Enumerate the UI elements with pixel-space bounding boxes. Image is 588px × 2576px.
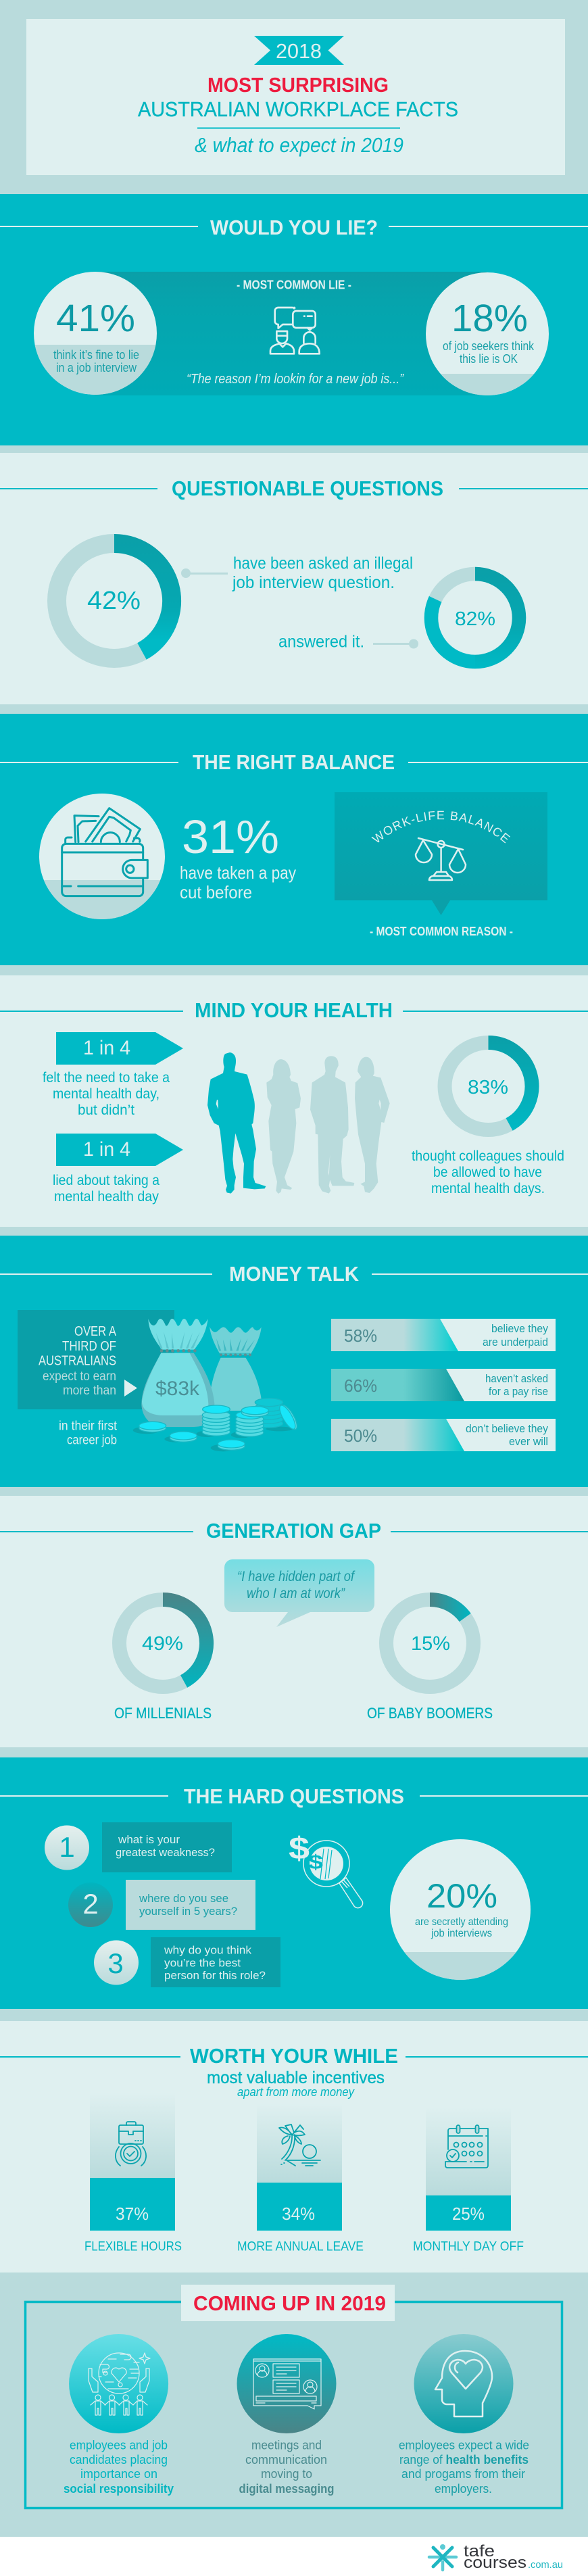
callout: work-life balance: WORK-LIFE BALANCE: [372, 811, 510, 844]
donut chart: 49% of millenials: [114, 1599, 212, 1722]
panel: mind your health: [0, 975, 588, 1227]
bar: monthly day off: 25%: [452, 2204, 485, 2224]
donut chart: 15% of baby boomers: 15%: [411, 1633, 450, 1655]
item: health benefits: range of health benefits: [399, 2453, 529, 2466]
speech bubble: [224, 1559, 374, 1627]
stat circle: 18%: this lie is OK: [460, 352, 518, 366]
bar: 50%: 50%: [344, 1426, 377, 1446]
panel: generation gap: [0, 1496, 588, 1747]
text: thought colleagues: [412, 1148, 564, 1196]
bar: 58%: believe they: [491, 1322, 548, 1335]
bar: 66%: 66%: [344, 1376, 377, 1396]
stat circle: 41%: in a job interview: [56, 361, 137, 374]
heading: money talk: MONEY TALK: [229, 1262, 360, 1286]
bar: 66%: for a pay rise: [489, 1385, 548, 1398]
bar: 58%: [331, 1319, 556, 1351]
donut chart: 42%: [57, 543, 172, 658]
callout: over a third: THIRD OF: [62, 1339, 116, 1354]
panel: coming up in 2019: [26, 2285, 562, 2508]
arrow stat: lied: 1 in 4: [83, 1138, 130, 1161]
stat circle: 20%: job interviews: [431, 1928, 492, 1939]
text: in their first career job: in their first: [59, 1419, 118, 1433]
donut chart: 49% of millenials: 49%: [142, 1633, 183, 1655]
heading: the right balance: THE RIGHT BALANCE: [193, 750, 395, 774]
panel: questionable questions: [0, 453, 588, 704]
arrow stat: felt the need: [43, 1032, 183, 1118]
icon: palm tree and sun: [279, 2124, 320, 2166]
bar: flexible hours: 37%: [116, 2204, 149, 2224]
back stack: [139, 1399, 300, 1450]
bar: flexible hours: FLEXIBLE HOURS: [84, 2240, 182, 2254]
bar: 58%: are underpaid: [483, 1336, 548, 1348]
title text: & what to expect in 2019: [195, 133, 403, 157]
item: social responsibility: [64, 2334, 174, 2496]
arrow stat: felt the need: mental health day,: [53, 1086, 160, 1102]
callout: over a third: OVER A: [74, 1324, 117, 1339]
arrow stat: felt the need: but didn’t: [78, 1102, 134, 1118]
icon: briefcase and clock: [116, 2122, 146, 2166]
bar: more annual leave: 34%: [282, 2204, 315, 2224]
bar: 50%: [331, 1419, 556, 1451]
callout: over a third: more than: [63, 1384, 116, 1398]
bar: monthly day off: [413, 2107, 524, 2254]
question 1: [45, 1822, 232, 1872]
stat circle: 18%: of job seekers think: [443, 339, 535, 353]
item: health benefits: and progams from their: [401, 2467, 525, 2481]
callout: illegal question: have been asked an illegal: [233, 554, 413, 573]
logo: tafe courses: tafe: [464, 2542, 495, 2560]
text: thought colleagues: be allowed to have: [433, 1165, 542, 1180]
donut chart: 82%: 82%: [455, 608, 495, 630]
subheading: apart from more money: [237, 2085, 355, 2099]
callout: over a third: AUSTRALIANS: [39, 1353, 116, 1368]
icon: magnifier over dollar: [289, 1830, 363, 1908]
bar: more annual leave: MORE ANNUAL LEAVE: [237, 2240, 364, 2254]
title text: [138, 73, 458, 157]
bar: monthly day off: MONTHLY DAY OFF: [413, 2240, 524, 2254]
callout: over a third: expect to earn: [43, 1369, 116, 1384]
question 2: where do you see: [139, 1892, 228, 1905]
question 1: what is your: [118, 1833, 180, 1846]
heading: coming up in 2019: [181, 2285, 395, 2321]
donut chart: 83%: 83%: [468, 1077, 508, 1098]
heading: generation gap: GENERATION GAP: [206, 1519, 381, 1542]
donut chart: 83%: [445, 1042, 532, 1130]
speech bubble: “I have hidden part of: [237, 1569, 356, 1584]
stat circle: 20%: [390, 1839, 531, 1980]
question 1: 1: [59, 1831, 75, 1863]
bar: more annual leave: [237, 2104, 364, 2254]
item: digital messaging: [237, 2334, 337, 2496]
logo: tafe courses: [429, 2542, 563, 2572]
panel: the right balance: [0, 714, 588, 965]
donut chart: 15% of baby boomers: OF BABY BOOMERS: [367, 1705, 493, 1722]
item: social responsibility: importance on: [80, 2467, 157, 2481]
text: thought colleagues: mental health days.: [431, 1181, 545, 1196]
icon: magnifier over dollar: $: [308, 1851, 323, 1874]
question 3: person for this role?: [164, 1969, 266, 1982]
stat circle: 18%: [426, 272, 549, 396]
item: health benefits: employees expect a wide: [399, 2439, 529, 2452]
donut chart: 15% of baby boomers: [367, 1599, 493, 1722]
most common lie band: “The reason I’m lookin for a new job is...”: [187, 372, 404, 387]
icon: globe, hands and people: [89, 2353, 150, 2415]
logo: tafe courses: courses: [464, 2554, 526, 2572]
stat: 31%: 31%: [182, 810, 279, 863]
icon: chat window: [253, 2359, 321, 2409]
arrow stat: felt the need: 1 in 4: [83, 1037, 130, 1059]
icon: magnifier over dollar: $: [289, 1830, 310, 1866]
stat circle: 20%: 20%: [426, 1877, 497, 1915]
callout: over a third: [18, 1310, 174, 1409]
bar: 66%: [331, 1369, 556, 1401]
question 2: 2: [82, 1888, 99, 1920]
bar: flexible hours: [84, 2093, 182, 2254]
stat circle: 41%: 41%: [56, 297, 135, 340]
bar: 58%: 58%: [344, 1326, 377, 1346]
panel: the hard questions: [0, 1757, 588, 2009]
panel: worth your while: [0, 2021, 588, 2273]
illustration: money bags and coins: [133, 1319, 300, 1451]
icon: two people talking: [270, 308, 320, 354]
item: health benefits: [399, 2334, 529, 2496]
bar: 66%: haven’t asked: [485, 1372, 548, 1385]
item: social responsibility: social responsibility: [64, 2482, 174, 2496]
stat: 31%: [180, 810, 296, 902]
question 2: [68, 1880, 255, 1930]
silhouettes: four workers: [207, 1052, 390, 1194]
item: social responsibility: candidates placing: [70, 2453, 168, 2466]
most common lie band: - MOST COMMON LIE -: [237, 278, 351, 292]
text: thought colleagues: thought colleagues should: [412, 1148, 564, 1164]
panel: title: [26, 19, 565, 175]
heading: questionable questions: QUESTIONABLE QUESTIONS: [172, 477, 443, 500]
arrow stat: felt the need: felt the need to take a: [43, 1070, 170, 1086]
callout: illegal question: [181, 554, 413, 592]
stat circle: 41%: think it’s fine to lie: [53, 348, 139, 362]
donut chart: 49% of millenials: OF MILLENIALS: [114, 1705, 212, 1722]
stat circle: 18%: 18%: [451, 297, 528, 340]
icon: calendar: [445, 2125, 488, 2168]
heading: mind your health: MIND YOUR HEALTH: [195, 998, 393, 1022]
question 3: [94, 1937, 280, 1987]
heading: coming up in 2019: COMING UP IN 2019: [193, 2291, 386, 2315]
callout: work-life balance: [335, 792, 547, 915]
donut chart: 82%: [431, 574, 519, 662]
heading: the hard questions: THE HARD QUESTIONS: [184, 1784, 404, 1808]
item: digital messaging: communication: [245, 2453, 327, 2466]
heading: would you lie: WOULD YOU LIE?: [210, 216, 378, 239]
panel: would you lie: [0, 194, 588, 445]
callout: illegal question: job interview question.: [232, 573, 395, 592]
item: digital messaging: digital messaging: [239, 2482, 334, 2496]
stat: 31%: cut before: [180, 882, 252, 902]
panel: money talk: [0, 1236, 588, 1487]
stat: 31%: have taken a pay: [180, 862, 296, 883]
item: social responsibility: employees and job: [70, 2439, 168, 2452]
question 3: 3: [107, 1947, 124, 1979]
question 1: greatest weakness?: [116, 1846, 215, 1859]
arrow stat: lied: [53, 1134, 183, 1205]
icon: head with heart: [435, 2351, 492, 2416]
question 3: why do you think: [164, 1944, 251, 1956]
year ribbon: 2018: [276, 39, 322, 63]
icon: logo star: [429, 2544, 456, 2570]
year ribbon: [254, 36, 344, 65]
speech bubble: who I am at work”: [247, 1586, 345, 1601]
item: digital messaging: meetings and: [251, 2439, 322, 2452]
subheading: [207, 2068, 385, 2099]
text: in their first career job: [59, 1419, 118, 1448]
caption: most common reason: - MOST COMMON REASON -: [370, 925, 513, 938]
question 3: you’re the best: [164, 1956, 241, 1970]
item: digital messaging: moving to: [261, 2467, 312, 2481]
text: in their first career job: career job: [67, 1433, 117, 1448]
heading: worth your while: WORTH YOUR WHILE: [190, 2044, 398, 2068]
bar: 50%: ever will: [509, 1435, 548, 1448]
subheading: most valuable incentives: [207, 2068, 385, 2087]
most common lie band: [95, 272, 487, 395]
title text: AUSTRALIAN WORKPLACE FACTS: [138, 97, 458, 121]
logo: tafe courses: .com.au: [528, 2559, 563, 2571]
arrow stat: lied: mental health day: [54, 1189, 159, 1205]
arrow stat: lied: lied about taking a: [53, 1173, 160, 1188]
stat circle: 41%: [34, 272, 157, 395]
icon: scales: [416, 838, 466, 880]
wallet circle: [39, 794, 165, 921]
stat circle: 20%: are secretly attending: [415, 1916, 508, 1928]
bar: 50%: don’t believe they: [466, 1422, 548, 1435]
item: health benefits: employers.: [435, 2482, 492, 2496]
donut chart: 42%: 42%: [87, 587, 141, 615]
callout: answered it: [278, 633, 418, 652]
footer background: [0, 2537, 588, 2576]
icon: wallet: [62, 808, 147, 896]
callout: answered it: answered it.: [278, 633, 364, 652]
title text: MOST SURPRISING: [207, 73, 389, 97]
text: $83k: $83k: [155, 1378, 200, 1400]
question 2: yourself in 5 years?: [139, 1905, 237, 1918]
